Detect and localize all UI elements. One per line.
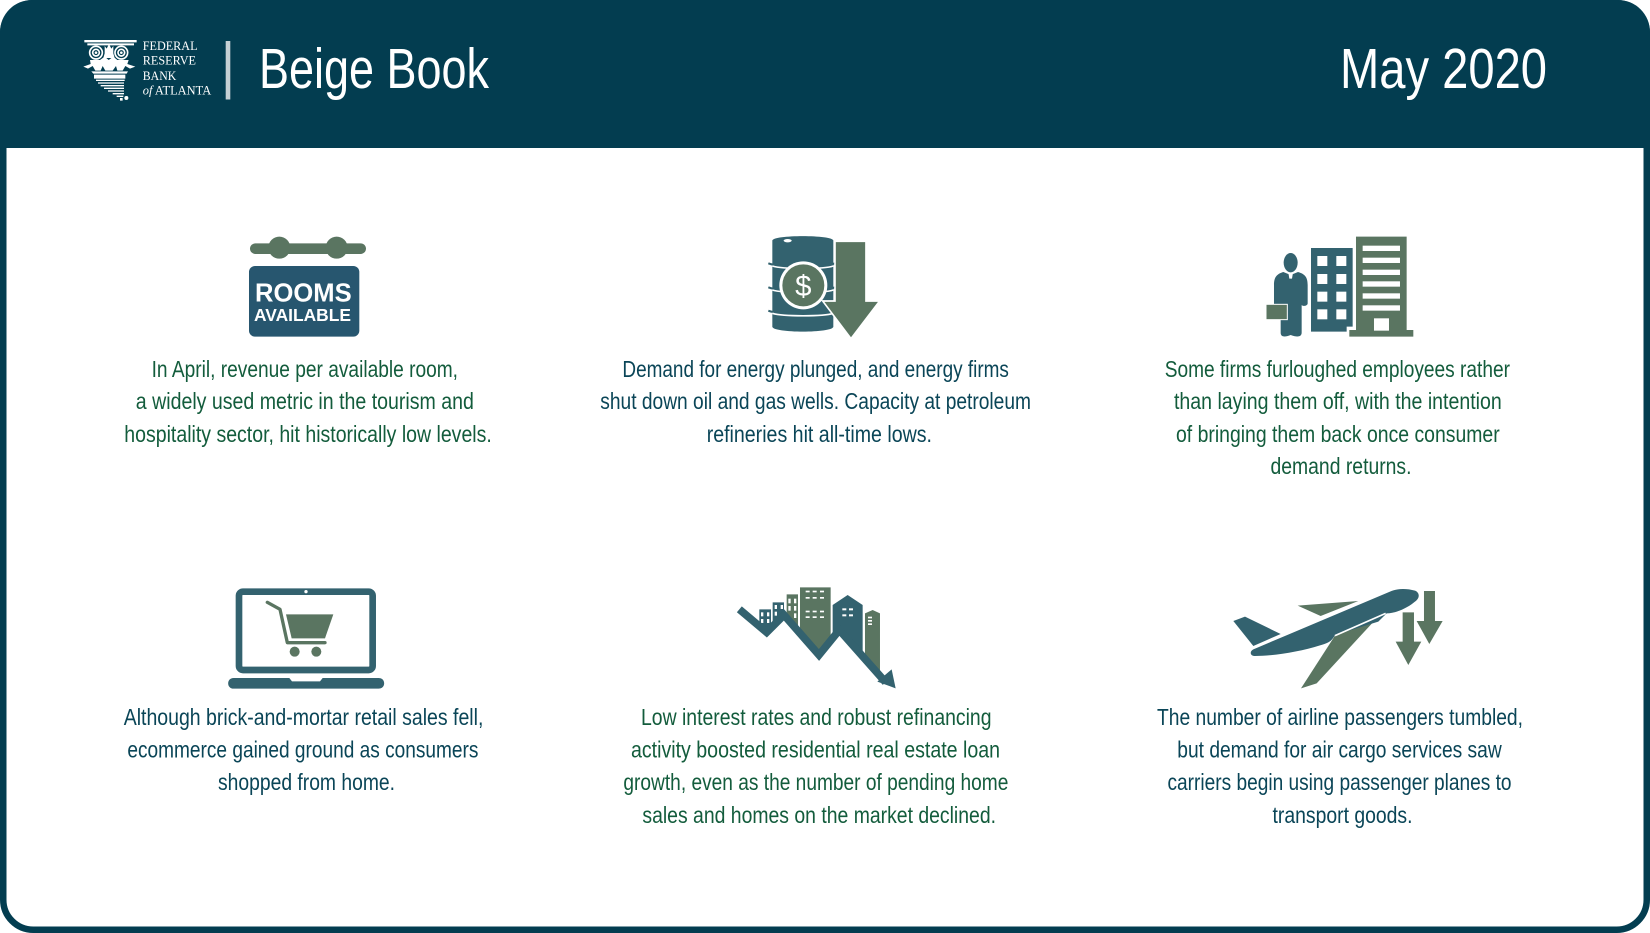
text: real estate: growth, even as the number of pending home <box>623 769 1008 795</box>
text: airlines: The number of airline passengers tumbled, <box>1157 704 1523 730</box>
logo: Federal Reserve Bank of Atlanta <box>83 39 211 101</box>
text: airlines: carriers begin using passenger planes to <box>1168 769 1512 795</box>
text: airlines <box>1157 704 1523 828</box>
icon: oil barrel with falling arrow: $ <box>795 270 811 303</box>
text: energy demand: shut down oil and gas wells. Capacity at petroleum <box>600 388 1031 414</box>
text: airlines: transport goods. <box>1272 802 1412 828</box>
text: furloughs <box>1165 356 1510 479</box>
text: ecommerce: Although brick-and-mortar retail sales fell, <box>124 704 483 730</box>
title: Beige Book <box>259 37 489 101</box>
header band <box>0 0 1650 148</box>
text: energy demand <box>600 356 1031 447</box>
text: real estate: Low interest rates and robust refinancing <box>641 704 992 730</box>
text: hotel revenue: In April, revenue per available room, <box>152 356 458 382</box>
text: ecommerce: ecommerce gained ground as consumers <box>127 736 478 762</box>
text: real estate: sales and homes on the market declined. <box>642 802 996 828</box>
icon: rooms available sign <box>249 237 366 337</box>
logo column capital <box>83 40 137 101</box>
logo wordmark: of ATLANTA <box>143 84 211 98</box>
text: furloughs: than laying them off, with the intention <box>1174 388 1502 414</box>
logo wordmark: RESERVE <box>143 54 196 68</box>
icon: rooms available sign: AVAILABLE <box>254 305 351 325</box>
text: furloughs: of bringing them back once consumer <box>1176 421 1500 447</box>
icon: laptop with shopping cart <box>228 590 384 689</box>
text: airlines: but demand for air cargo services saw <box>1177 736 1502 762</box>
icon: rooms available sign: ROOMS <box>255 277 352 307</box>
date: May 2020 <box>1340 37 1547 101</box>
logo wordmark: BANK <box>143 69 176 83</box>
text: ecommerce <box>124 704 483 795</box>
text: real estate <box>623 704 1008 828</box>
icon: airplane with two down arrows <box>1233 589 1443 688</box>
text: ecommerce: shopped from home. <box>218 769 395 795</box>
logo wordmark: FEDERAL <box>143 39 198 53</box>
logo divider <box>226 41 230 100</box>
text: energy demand: refineries hit all-time lows. <box>707 421 932 447</box>
text: hotel revenue: hospitality sector, hit historically low levels. <box>124 421 492 447</box>
icon: oil barrel with falling arrow <box>768 236 880 339</box>
text: furloughs: demand returns. <box>1270 453 1412 479</box>
text: furloughs: Some firms furloughed employees rather <box>1165 356 1510 382</box>
icon: city buildings with falling trend arrow <box>739 587 896 688</box>
text: hotel revenue <box>124 356 492 447</box>
text: hotel revenue: a widely used metric in the tourism and <box>136 388 474 414</box>
logo wordmark <box>143 39 211 98</box>
text: energy demand: Demand for energy plunged, and energy firms <box>622 356 1009 382</box>
icon: businessman and office buildings <box>1266 237 1413 337</box>
text: real estate: activity boosted residential real estate loan <box>631 736 1000 762</box>
